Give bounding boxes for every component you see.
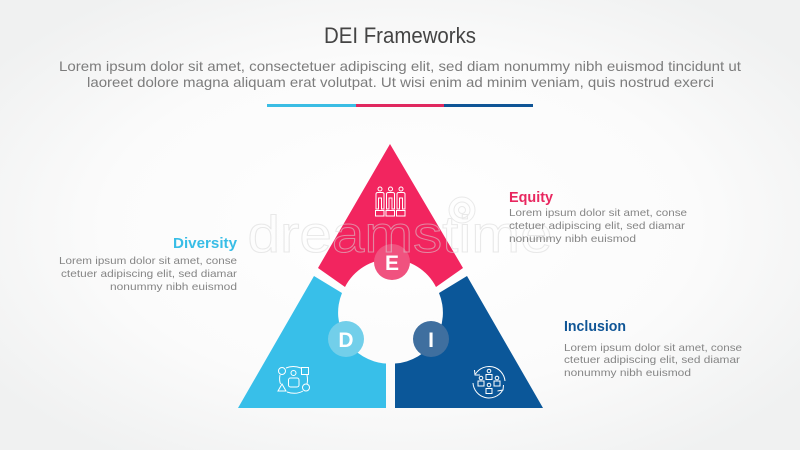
callout: diversity: Lorem ipsum dolor sit amet, conse (59, 255, 237, 267)
callout: inclusion (564, 318, 742, 379)
callout: equity (509, 189, 687, 245)
watermark: dreamstime (248, 206, 552, 264)
callout: equity: Equity (509, 189, 554, 206)
icon: group with cycle arrows (473, 366, 505, 398)
icon: three people on pedestals (376, 187, 405, 216)
title: DEI Frameworks (324, 23, 476, 48)
badge: D (328, 321, 364, 357)
icon: diverse shapes and person (278, 366, 310, 393)
callout: diversity: nonummy nibh euismod (110, 281, 237, 293)
callout: inclusion: Inclusion (564, 318, 626, 335)
callout: diversity: Diversity (173, 235, 238, 252)
intro text: laoreet dolore magna aliquam erat volutpat. Ut wisi enim ad minim veniam, quis nostrud exerci (87, 74, 714, 90)
segment: equity (318, 144, 463, 287)
callout: inclusion: nonummy nibh euismod (564, 367, 691, 379)
callout: diversity: ctetuer adipiscing elit, sed diamar (61, 268, 238, 280)
intro text: Lorem ipsum dolor sit amet, consectetuer adipiscing elit, sed diam nonummy nibh euismod tincidunt ut (59, 58, 741, 74)
callout: inclusion: Lorem ipsum dolor sit amet, conse (564, 342, 742, 354)
callout: equity: ctetuer adipiscing elit, sed diamar (509, 220, 686, 232)
callout: diversity (59, 235, 238, 293)
badge: I: I (428, 329, 434, 352)
triangle diagram (238, 144, 543, 408)
title divider bar (267, 104, 533, 107)
badge: E: E (385, 252, 399, 275)
badge: E (374, 244, 410, 280)
callout: equity: nonummy nibh euismod (509, 233, 636, 245)
segment: diversity (238, 276, 386, 408)
callout: equity: Lorem ipsum dolor sit amet, conse (509, 207, 687, 219)
badge: D: D (338, 329, 354, 352)
badge: I (413, 321, 449, 357)
callout: inclusion: ctetuer adipiscing elit, sed diamar (564, 354, 741, 366)
segment: inclusion (395, 276, 543, 408)
intro text (59, 58, 741, 90)
